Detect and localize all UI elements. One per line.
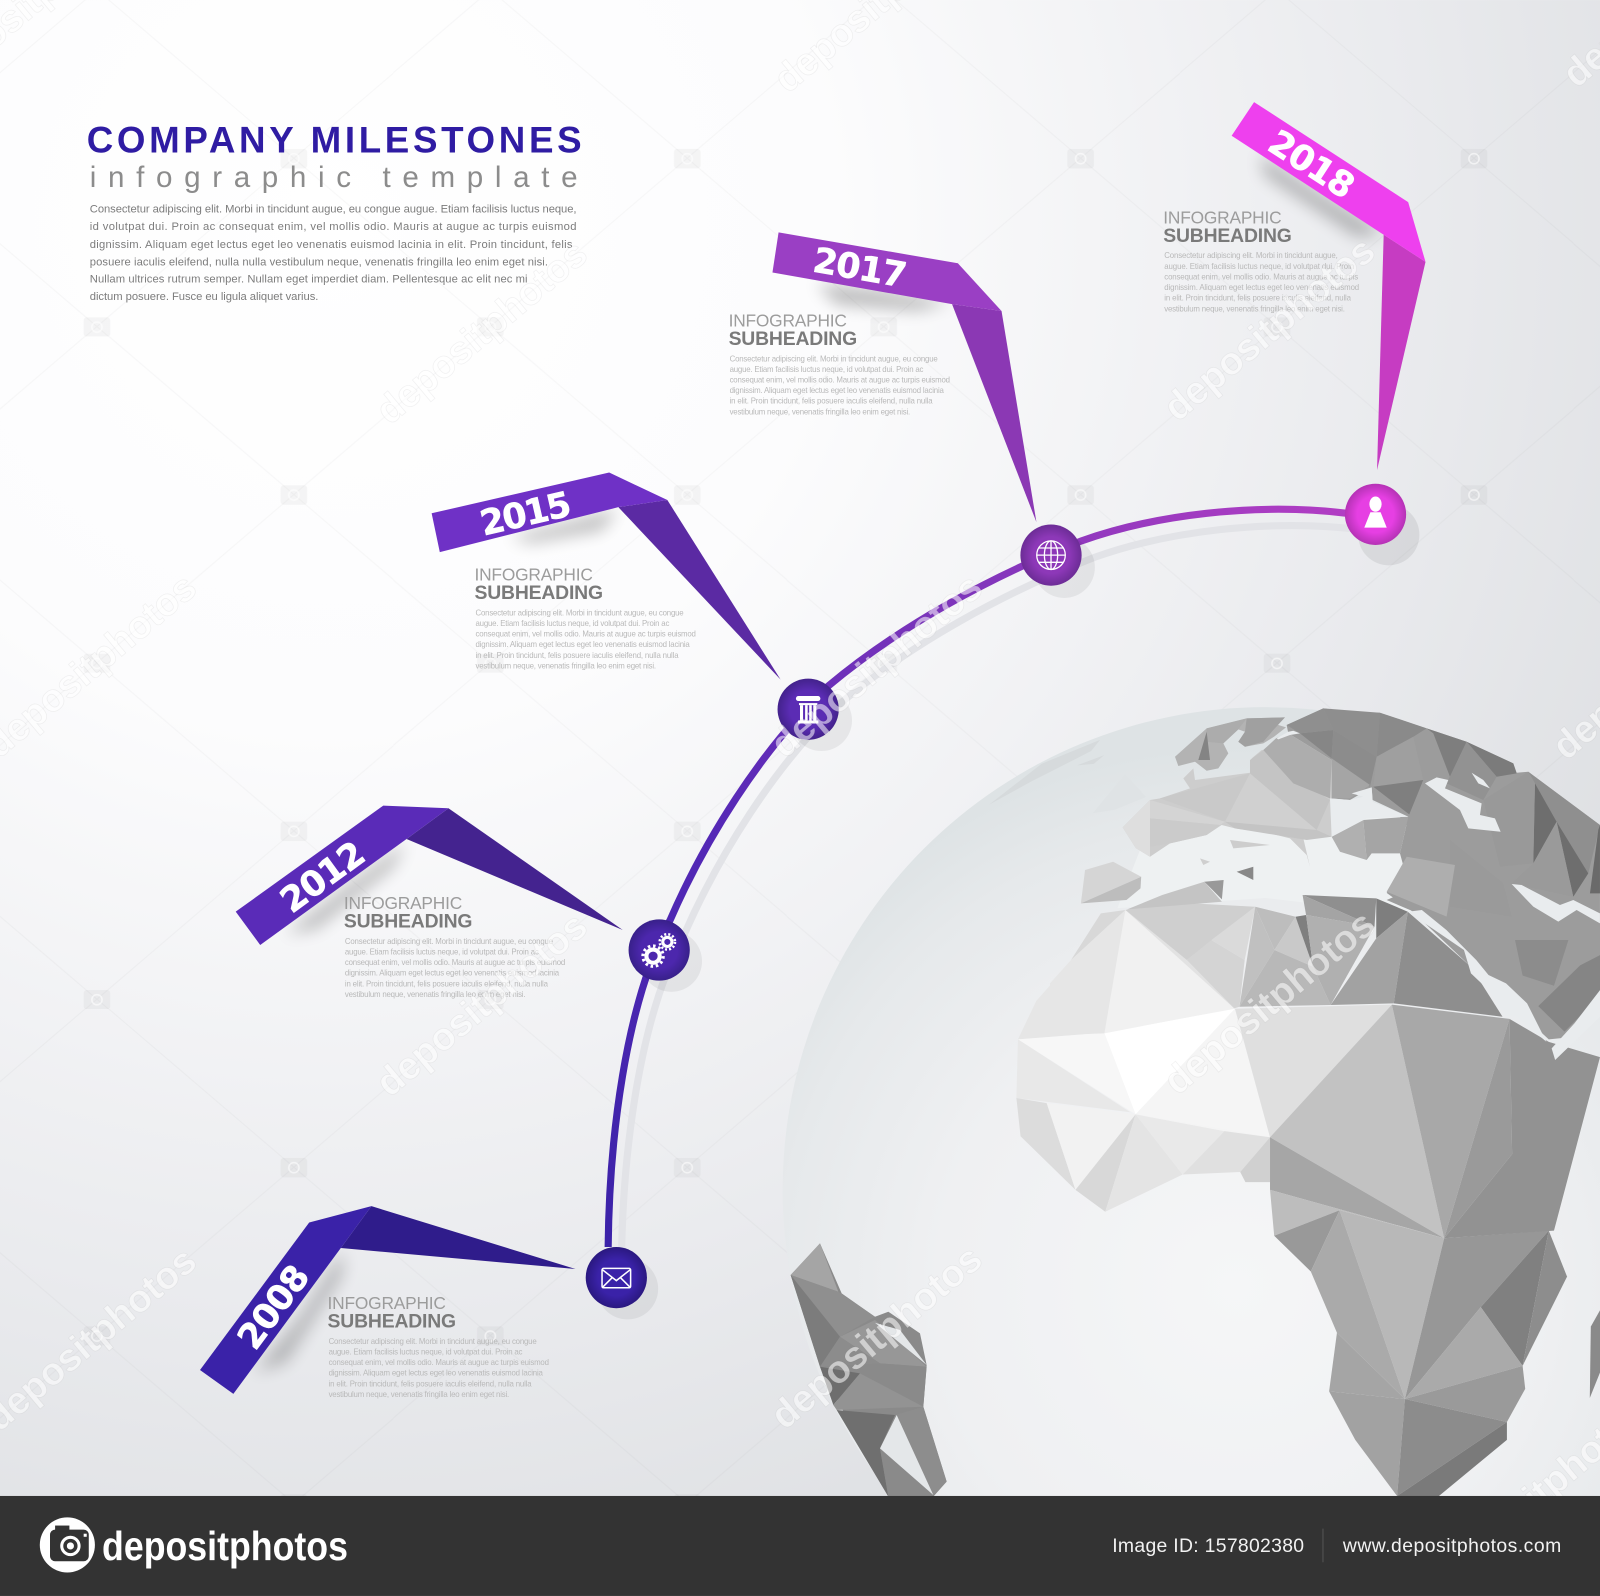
ribbon tail [1377,235,1426,470]
node [1345,484,1406,545]
body text: vestibulum neque, venenatis fringilla leo enim eget nisi. [730,407,910,416]
body text: in elit. Proin tincidunt, felis posuere iaculis eleifend, nulla nulla [730,397,933,406]
subheading text: INFOGRAPHIC [328,1293,446,1313]
ribbon banner [432,472,667,552]
subheading text: INFOGRAPHIC [729,311,847,331]
body text: augue. Etiam facilisis luctus neque, id volutpat dui. Proin ac [476,619,669,628]
body text: dignissim. Aliquam eget lectus eget leo venenatis euismod lacinia [329,1369,543,1378]
node shadow [641,931,702,992]
subheading text: INFOGRAPHIC [1163,208,1282,228]
ribbon shadow [255,1250,343,1372]
subheading text: INFOGRAPHIC [474,565,593,585]
node [778,679,839,740]
logo wordmark: depositphotos [102,1523,348,1569]
intro paragraph: Consectetur adipiscing elit. Morbi in tincidunt augue, eu congue augue. Etiam facilisis luctus neque, [90,203,577,215]
icon: person [1364,496,1387,528]
inland seas [1277,731,1600,923]
heading: company milestones: COMPANY MILESTONES [87,120,582,161]
title block [87,120,582,303]
europe [1123,733,1332,880]
body text: consequat enim, vel mollis odio. Mauris at augue ac turpis euismod [329,1358,549,1367]
body text [1164,251,1359,313]
ribbon banner [1232,102,1426,262]
body text: vestibulum neque, venenatis fringilla leo enim eget nisi. [476,661,656,670]
body text: Consectetur adipiscing elit. Morbi in tincidunt augue, eu congue [329,1337,537,1346]
body text: augue. Etiam facilisis luctus neque, id volutpat dui. Proin [1164,262,1354,271]
subheading text: INFOGRAPHIC [344,893,462,913]
milestone 2015: SUBHEADING [474,582,603,604]
ribbon banner [236,806,448,945]
year label: 2015 [477,485,575,544]
milestone 2012: SUBHEADING [344,911,472,933]
ribbon tail [618,500,781,680]
intro paragraph: dictum posuere. Fusce eu ligula aliquet varius. [90,291,318,303]
body text: Consectetur adipiscing elit. Morbi in tincidunt augue, eu congue [476,608,684,617]
body text: consequat enim, vel mollis odio. Mauris at augue ac turpis euismod [476,630,696,639]
watermarks: depositphotos [763,1237,991,1438]
mediterranean light water [1117,816,1439,918]
icon: globe [1037,541,1065,569]
milestone 2008: SUBHEADING [328,1311,456,1333]
year label: 2012 [273,834,373,921]
watermarks: depositphotos [763,566,991,766]
timeline arc shadow [621,526,1360,1263]
node [1020,525,1082,586]
body text: augue. Etiam facilisis luctus neque, id volutpat dui. Proin ac [345,948,539,957]
ribbon tail [341,1206,576,1269]
body text: in elit. Proin tincidunt, felis posuere iaculis eleifend, nulla nulla [345,979,549,988]
body text: consequat enim, vel mollis odio. Mauris at augue ac turpis [1164,272,1358,281]
scandinavia [1175,717,1286,771]
ribbon banner [772,232,1002,311]
node shadow [791,690,852,751]
body text: dignissim. Aliquam eget lectus eget leo venenatis euismod lacinia [730,386,945,395]
ribbon shadow [286,842,406,934]
africa [1016,910,1600,1496]
ribbon shadow [510,508,618,543]
body text: dignissim. Aliquam eget lectus eget leo venenatis euismod lacinia [476,640,690,649]
icon: envelope [602,1268,631,1288]
milestone 2012 [236,806,702,999]
ribbon shadow [1260,155,1384,237]
globe disc [783,707,1600,1596]
arabia [1387,858,1600,1039]
icon: camera [40,1517,95,1572]
body text: consequat enim, vel mollis odio. Mauris at augue ac turpis euismod [730,375,950,384]
icon: column [796,696,820,724]
watermarks: depositphotos [368,904,596,1105]
body text: in elit. Proin tincidunt, felis posuere iaculis eleifend, nulla nulla [476,651,679,660]
milestone 2008 [200,1206,658,1399]
north atlantic islands [989,740,1146,813]
year label: 2008 [230,1258,318,1357]
milestone 2015 [432,472,852,751]
body text: in elit. Proin tincidunt, felis posuere iaculis eleifend, nulla nulla [329,1379,532,1388]
year label: 2018 [1261,123,1361,207]
south america [791,1243,947,1497]
intro paragraph: id volutpat dui. Proin ac consequat enim, vel mollis odio. Mauris at augue ac turpis euismod [90,221,577,233]
year label: 2017 [810,241,909,296]
body text: Consectetur adipiscing elit. Morbi in tincidunt augue, [1164,251,1338,260]
footer bar [0,1496,1600,1596]
watermarks: depositphotos [368,232,596,433]
body text: vestibulum neque, venenatis fringilla leo enim eget nisi. [345,990,526,999]
watermarks: depositphotos [1156,902,1383,1103]
watermarks: depositphotos [1156,229,1383,430]
body text [345,937,565,999]
node shadow [1034,537,1095,598]
madagascar [1590,1310,1600,1398]
body text: Consectetur adipiscing elit. Morbi in tincidunt augue, eu congue [730,354,938,363]
body text: vestibulum neque, venenatis fringilla leo enim eget nisi. [1164,304,1345,313]
body text: vestibulum neque, venenatis fringilla leo enim eget nisi. [329,1390,509,1399]
subheading: infographic template: infographic template [90,161,578,194]
website: www.depositphotos.com [1342,1535,1561,1557]
red sea and gulf of aden [1408,910,1600,1060]
ribbon banner [200,1206,371,1394]
node shadow [1358,504,1419,565]
body text: augue. Etiam facilisis luctus neque, id volutpat dui. Proin ac [329,1348,523,1357]
image id: Image ID: 157802380 [1112,1535,1304,1557]
intro paragraph: posuere iaculis eleifend, nulla nulla vestibulum neque, venenatis fringilla leo enim eget nisi. [90,256,548,268]
milestone 2018 [1163,102,1426,565]
body text: augue. Etiam facilisis luctus neque, id volutpat dui. Proin ac [730,365,924,374]
body text [730,354,950,416]
icon: gears [643,934,675,966]
node shadow [597,1258,658,1319]
intro paragraph: dignissim. Aliquam eget lectus eget leo venenatis euismod lacinia in elit. Proin tincidunt, felis [90,239,573,251]
intro paragraph [90,203,577,303]
milestone 2018: SUBHEADING [1163,225,1292,247]
body text: consequat enim, vel mollis odio. Mauris at augue ac turpis euismod [345,958,565,967]
intro paragraph: Nullam ultrices rutrum semper. Nullam eget imperdiet diam. Pellentesque ac elit nec mi [90,274,528,286]
low-poly world map [791,708,1600,1497]
body text: dignissim. Aliquam eget lectus eget leo venenatis euismod [1164,283,1359,292]
body text [329,1337,549,1399]
milestone 2017: SUBHEADING [729,328,857,350]
eurasia [1287,708,1600,940]
body text: dignissim. Aliquam eget lectus eget leo venenatis euismod lacinia [345,969,560,978]
ribbon shadow [816,284,951,310]
ribbon tail [952,304,1036,522]
north africa and iberia [1050,862,1503,1035]
milestone 2017 [729,232,1095,598]
node [586,1247,647,1308]
body text: in elit. Proin tincidunt, felis posuere iaculis eleifend, nulla [1164,294,1352,303]
node [629,919,690,981]
footer logo [40,1517,348,1572]
body text [476,608,696,670]
body text: Consectetur adipiscing elit. Morbi in tincidunt augue, eu congue [345,937,554,946]
ribbon tail [407,808,623,930]
timeline arc [608,509,1347,1247]
